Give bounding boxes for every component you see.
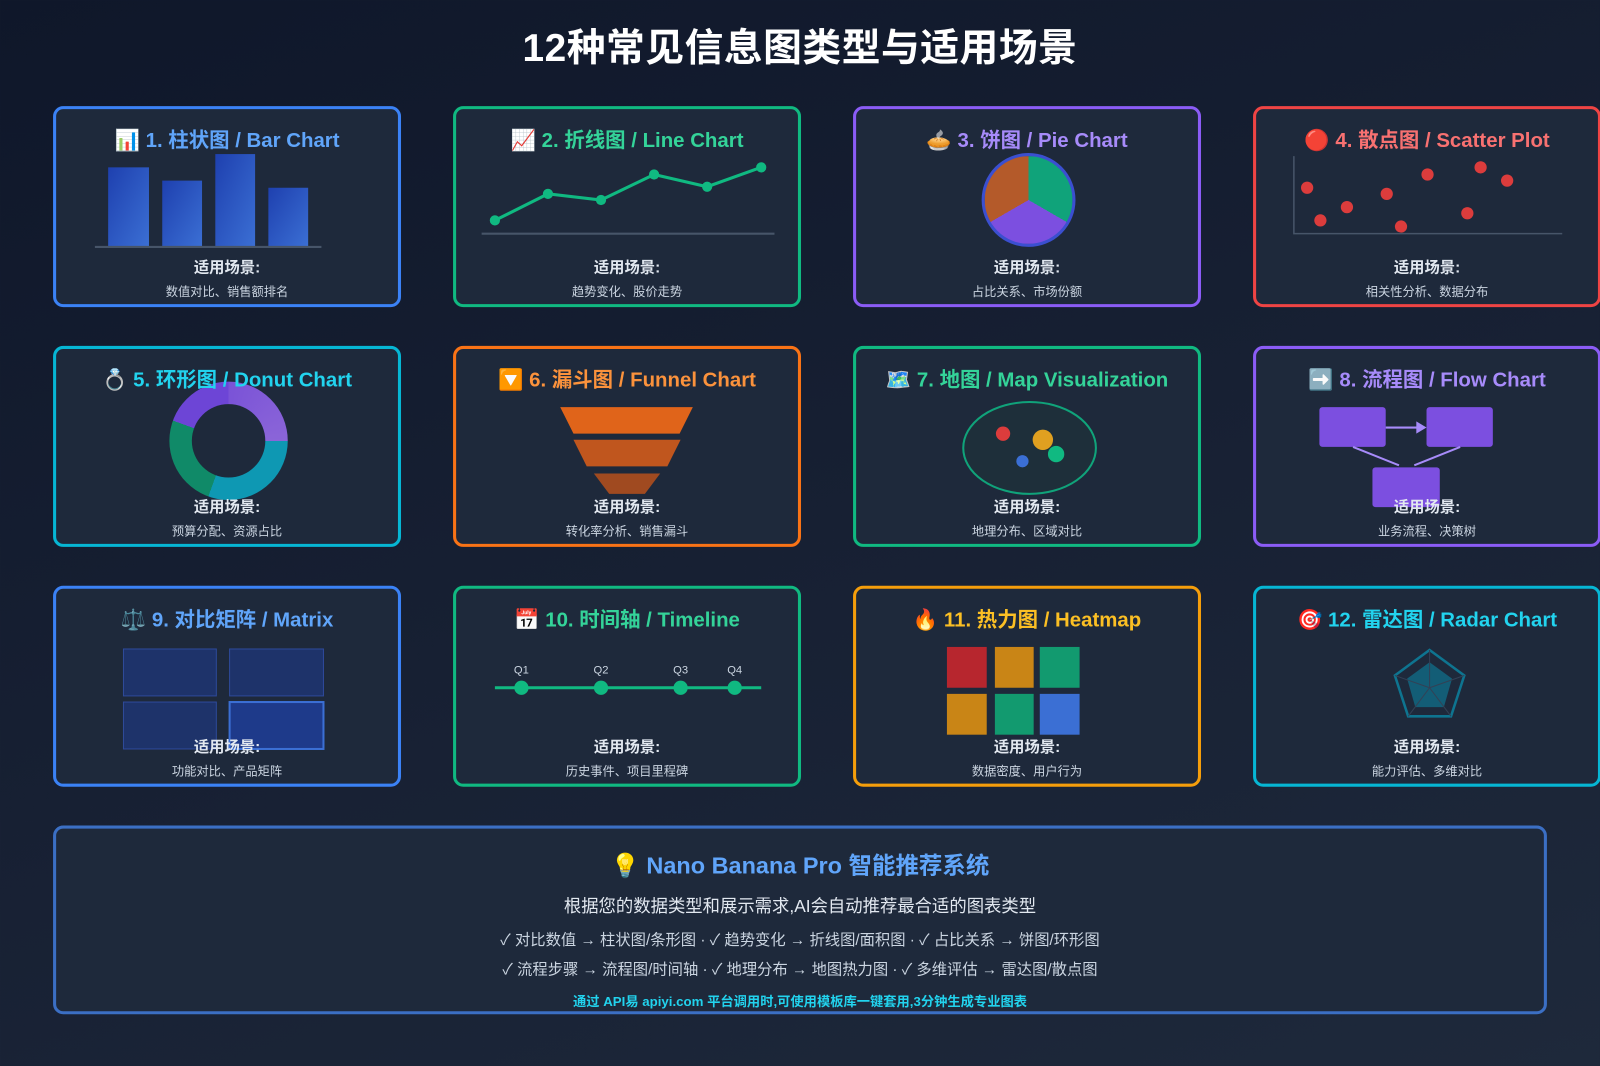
panel: heatmap xyxy=(853,586,1201,787)
panel: map visualization: 地理分布、区域对比 xyxy=(972,524,1082,539)
panel: funnel chart: 🔽 6. 漏斗图 / Funnel Chart xyxy=(498,369,756,392)
panel: map visualization: 🗺️ 7. 地图 / Map Visualization xyxy=(886,369,1168,392)
panel: map visualization xyxy=(853,346,1201,547)
chart: timeline: Q3 xyxy=(673,664,688,676)
panel: timeline: 历史事件、项目里程碑 xyxy=(566,764,688,779)
chart: radar xyxy=(1394,648,1466,718)
panel: scatter plot: 适用场景: xyxy=(1394,259,1460,277)
panel: radar chart: 🎯 12. 雷达图 / Radar Chart xyxy=(1297,609,1557,632)
panel: line chart: 📈 2. 折线图 / Line Chart xyxy=(511,130,743,152)
panel: donut chart: 💍 5. 环形图 / Donut Chart xyxy=(102,369,352,392)
footer note: 通过 API易 apiyi.com 平台调用时,可使用模板库一键套用,3分钟生成专业图表 xyxy=(573,994,1027,1009)
panel: timeline xyxy=(453,586,801,787)
chart: scatter xyxy=(1293,156,1562,234)
panel: donut chart: 适用场景: xyxy=(194,499,260,516)
chart: funnel xyxy=(560,407,693,494)
panel: heatmap: 🔥 11. 热力图 / Heatmap xyxy=(913,609,1141,632)
panel: pie chart: 占比关系、市场份额 xyxy=(972,285,1082,299)
panel: bar chart: 适用场景: xyxy=(194,259,260,277)
panel: heatmap: 数据密度、用户行为 xyxy=(972,764,1082,779)
panel: funnel chart: 转化率分析、销售漏斗 xyxy=(566,524,688,539)
chart: bars xyxy=(94,154,322,248)
text block: description: 根据您的数据类型和展示需求,AI会自动推荐最合适的图表类型 xyxy=(564,897,1036,916)
panel: scatter plot xyxy=(1253,106,1600,307)
chart: line xyxy=(482,162,774,235)
chart: timeline: Q4 xyxy=(727,664,742,676)
text block: rules: ✓ 流程步骤 → 流程图/时间轴 · ✓ 地理分布 → 地图热力图 · ✓ 多维评估 → 雷达图/散点图 xyxy=(502,961,1098,979)
panel: pie chart: 🥧 3. 饼图 / Pie Chart xyxy=(926,130,1128,152)
panel: radar chart xyxy=(1253,586,1600,787)
panel: donut chart xyxy=(53,346,401,547)
chart: pie xyxy=(982,153,1076,247)
panel: funnel chart xyxy=(453,346,801,547)
panel: funnel chart: 适用场景: xyxy=(594,499,660,516)
panel: flow chart: ➡️ 8. 流程图 / Flow Chart xyxy=(1308,369,1546,392)
panel: matrix: 功能对比、产品矩阵 xyxy=(172,764,282,779)
panel: matrix: ⚖️ 9. 对比矩阵 / Matrix xyxy=(121,609,333,632)
panel: donut chart: 预算分配、资源占比 xyxy=(172,524,282,539)
title: 12种常见信息图类型与适用场景 xyxy=(523,28,1077,70)
chart: timeline xyxy=(494,664,762,695)
panel: bar chart xyxy=(53,106,401,307)
panel: pie chart xyxy=(853,106,1201,307)
panel: scatter plot: 🔴 4. 散点图 / Scatter Plot xyxy=(1304,130,1550,152)
chart: donut xyxy=(169,382,288,500)
panel: flow chart: 适用场景: xyxy=(1394,499,1460,516)
panel: timeline: 适用场景: xyxy=(594,739,660,756)
chart: matrix xyxy=(123,648,324,750)
panel: bar chart: 数值对比、销售额排名 xyxy=(166,285,288,299)
heading: 💡 Nano Banana Pro 智能推荐系统 xyxy=(611,852,989,879)
panel: line chart xyxy=(453,106,801,307)
panel: flow chart: 业务流程、决策树 xyxy=(1378,524,1476,539)
panel: recommendation system xyxy=(53,826,1547,1014)
panel: radar chart: 适用场景: xyxy=(1394,739,1460,756)
panel: line chart: 趋势变化、股价走势 xyxy=(572,285,682,299)
panel: line chart: 适用场景: xyxy=(594,259,660,277)
chart: flow xyxy=(1319,407,1493,508)
panel: flow chart xyxy=(1253,346,1600,547)
chart: timeline: Q2 xyxy=(594,664,609,676)
panel: map visualization: 适用场景: xyxy=(994,499,1060,516)
panel: matrix: 适用场景: xyxy=(194,739,260,756)
chart: timeline: Q1 xyxy=(514,664,529,676)
panel: timeline: 📅 10. 时间轴 / Timeline xyxy=(514,609,740,632)
panel: bar chart: 📊 1. 柱状图 / Bar Chart xyxy=(115,130,340,152)
panel: scatter plot: 相关性分析、数据分布 xyxy=(1366,285,1488,299)
panel: matrix xyxy=(53,586,401,787)
panel: pie chart: 适用场景: xyxy=(994,259,1060,277)
text block: rules xyxy=(500,932,1100,979)
chart: map xyxy=(962,401,1097,495)
panel: radar chart: 能力评估、多维对比 xyxy=(1372,764,1482,779)
panel: heatmap: 适用场景: xyxy=(994,739,1060,756)
chart: heatmap xyxy=(946,646,1080,735)
text block: rules: ✓ 对比数值 → 柱状图/条形图 · ✓ 趋势变化 → 折线图/面积图 · ✓ 占比关系 → 饼图/环形图 xyxy=(500,932,1100,949)
